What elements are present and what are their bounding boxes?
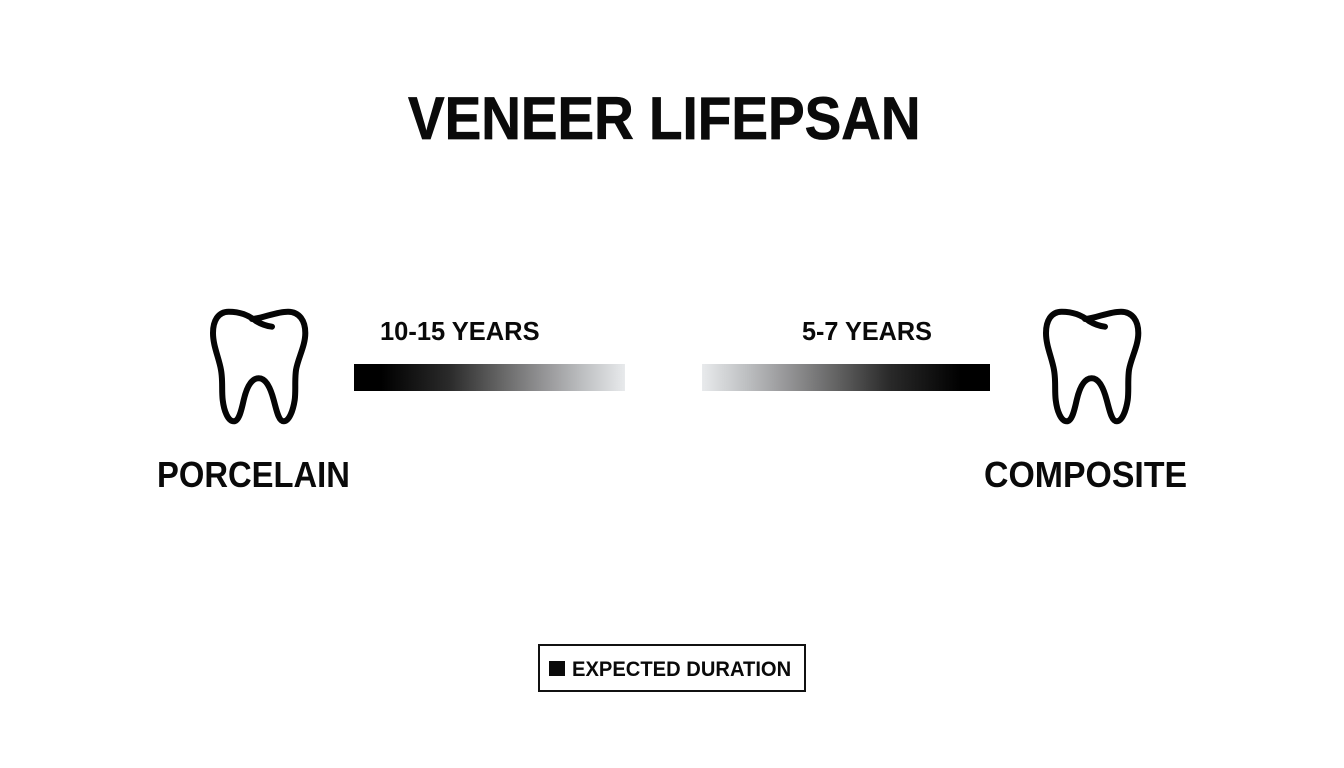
- legend text: EXPECTED DURATION: [572, 658, 791, 681]
- legend swatch: [549, 661, 565, 676]
- icon: composite tooth: [1043, 308, 1142, 424]
- icon: porcelain tooth: [210, 308, 308, 424]
- composite duration label: 5-7 YEARS: [802, 316, 932, 346]
- composite duration bar: [702, 364, 990, 391]
- porcelain label: PORCELAIN: [157, 454, 350, 494]
- porcelain duration bar: [354, 364, 625, 391]
- composite label: COMPOSITE: [984, 454, 1187, 494]
- title: VENEER LIFEPSAN: [408, 85, 921, 152]
- porcelain duration label: 10-15 YEARS: [380, 316, 540, 346]
- panel: porcelain: [157, 308, 625, 494]
- panel: composite: [702, 308, 1187, 494]
- legend: [538, 644, 806, 692]
